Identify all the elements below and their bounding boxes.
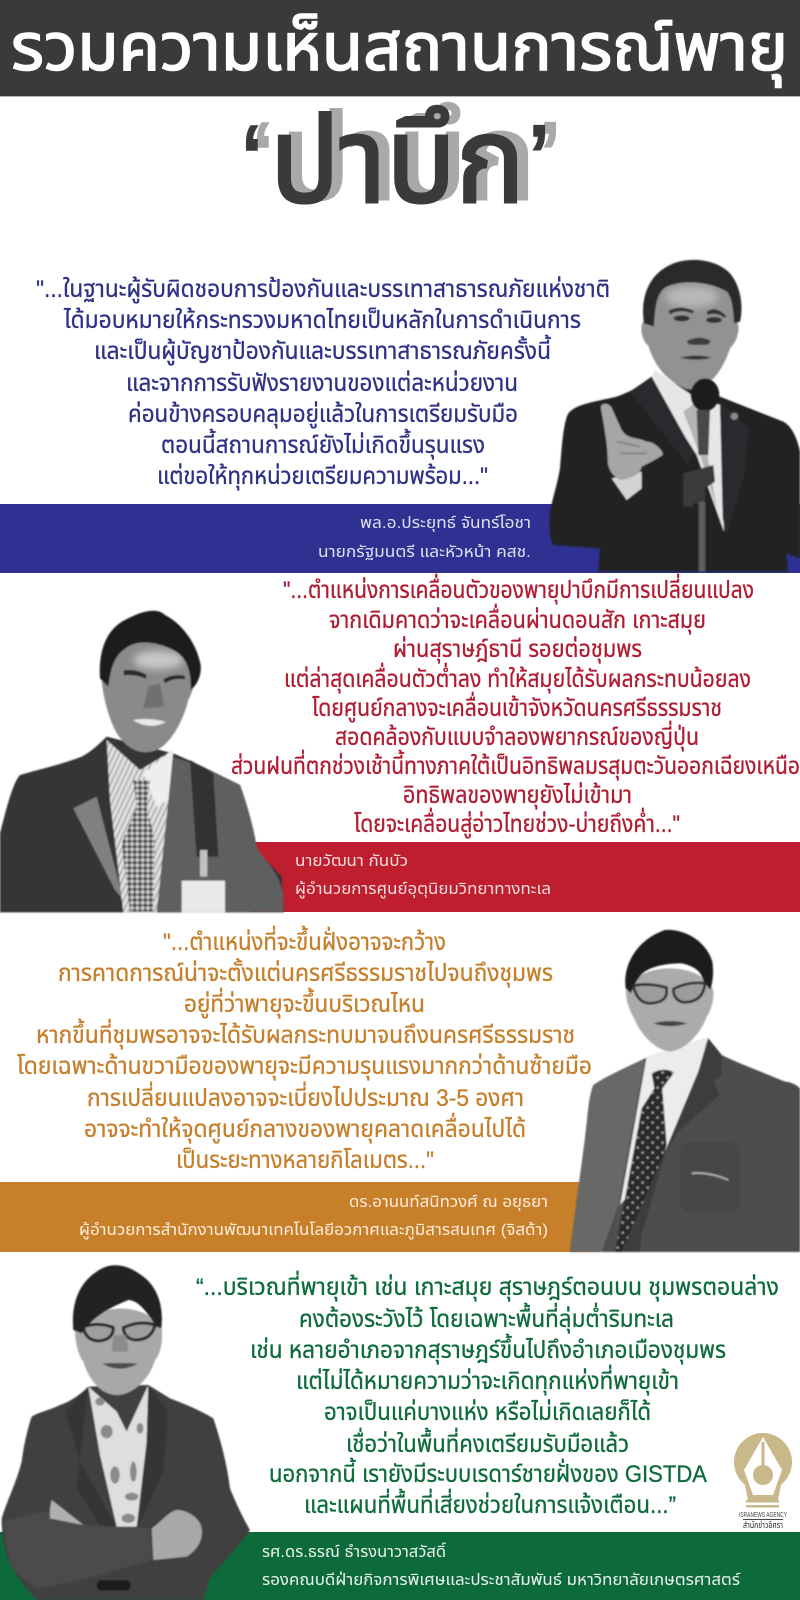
quote text orange: อาจจะทำให้จุดศูนย์กลางของพายุคลาดเคลื่อนไปได้ bbox=[84, 1112, 526, 1144]
title: รวมความเห็นสถานการณ์พายุ bbox=[11, 10, 788, 87]
speaker name bbox=[79, 1194, 548, 1239]
quote text orange: การคาดการณ์น่าจะตั้งแต่นครศรีธรรมราชไปจนถึงชุมพร bbox=[58, 957, 553, 988]
subtitle: storm name: ปาบึก bbox=[281, 91, 536, 225]
quote text green: แต่ไม่ได้หมายความว่าจะเกิดทุกแห่งที่พายุเข้า bbox=[296, 1364, 679, 1396]
speaker name: นายวัฒนา กันบัว bbox=[295, 853, 408, 870]
quote text blue: และเป็นผู้บัญชาป้องกันและบรรเทาสาธารณภัยครั้งนี้ bbox=[94, 334, 551, 366]
quote text red: แต่ล่าสุดเคลื่อนตัวต่ำลง ทำให้สมุยได้รับผลกระทบน้อยลง bbox=[284, 662, 751, 694]
photo: Anond bbox=[570, 930, 800, 1252]
name band orange bbox=[0, 1182, 600, 1252]
name band blue bbox=[0, 504, 800, 573]
speaker name bbox=[295, 853, 551, 898]
speaker name: ดร.อานนท์สนิทวงศ์ ณ อยุธยา bbox=[349, 1194, 548, 1211]
quote text blue: "...ในฐานะผู้รับผิดชอบการป้องกันและบรรเทาสาธารณภัยแห่งชาติ bbox=[36, 275, 610, 304]
panel: quote 1 Prayut bbox=[0, 260, 800, 573]
quote text red: โดยจะเคลื่อนสู่อ่าวไทยช่วง-บ่ายถึงค่ำ..." bbox=[354, 807, 680, 839]
quote text green: “...บริเวณที่พายุเข้า เช่น เกาะสมุย สุราษฎร์ตอนบน ชุมพรตอนล่าง bbox=[196, 1270, 779, 1302]
subtitle: storm name: ’ bbox=[527, 102, 551, 223]
quote text orange: เป็นระยะทางหลายกิโลเมตร..." bbox=[176, 1147, 434, 1174]
quote text orange: อยู่ที่ว่าพายุจะขึ้นบริเวณไหน bbox=[184, 987, 425, 1019]
quote text green: เช่น หลายอำเภอจากสุราษฎร์ขึ้นไปถึงอำเภอเมืองชุมพร bbox=[250, 1333, 726, 1365]
quote text green: เชื่อว่าในพื้นที่คงเตรียมรับมือแล้ว bbox=[346, 1427, 629, 1458]
subtitle: storm name: ‘ bbox=[251, 99, 275, 220]
name band red bbox=[250, 842, 800, 912]
speaker name bbox=[318, 515, 531, 561]
quote text blue: ตอนนี้สถานการณ์ยังไม่เกิดขึ้นรุนแรง bbox=[161, 428, 485, 460]
speaker name: ผู้อำนวยการศูนย์อุตุนิยมวิทยาทางทะเล bbox=[295, 881, 551, 898]
speaker name: ผู้อำนวยการสำนักงานพัฒนาเทคโนโลยีอวกาศและภูมิสารสนเทศ (จิสด้า) bbox=[79, 1222, 548, 1239]
quote text green: คงต้องระวังไว้ โดยเฉพาะพื้นที่ลุ่มต่ำริมทะเล bbox=[299, 1302, 674, 1334]
quote text red: สอดคล้องกับแบบจำลองพยากรณ์ของญี่ปุ่น bbox=[335, 720, 699, 752]
quote text red bbox=[231, 573, 800, 839]
quote text blue: ค่อนข้างครอบคลุมอยู่แล้วในการเตรียมรับมือ bbox=[128, 400, 518, 429]
speaker name bbox=[262, 1542, 741, 1589]
subtitle: storm name: ปาบึก bbox=[270, 94, 525, 228]
panel: quote 4 Thon bbox=[0, 1265, 800, 1600]
panel: quote 2 Wattana bbox=[0, 573, 800, 912]
photo: Thon bbox=[2, 1265, 250, 1600]
speaker name: นายกรัฐมนตรี และหัวหน้า คสช. bbox=[318, 544, 531, 561]
quote text red: อิทธิพลของพายุยังไม่เข้ามา bbox=[403, 781, 632, 810]
speaker name: รองคณบดีฝ่ายกิจการพิเศษและประชาสัมพันธ์ มหาวิทยาลัยเกษตรศาสตร์ bbox=[262, 1571, 741, 1589]
quote text blue: ได้มอบหมายให้กระทรวงมหาดไทยเป็นหลักในการดำเนินการ bbox=[63, 307, 581, 334]
photo: Wattana bbox=[0, 611, 284, 912]
quote text red: โดยศูนย์กลางจะเคลื่อนเข้าจังหวัดนครศรีธรรมราช bbox=[312, 691, 722, 723]
quote text orange bbox=[17, 925, 592, 1174]
quote text red: จากเดิมคาดว่าจะเคลื่อนผ่านดอนสัก เกาะสมุย bbox=[329, 603, 706, 635]
quote text green: และแผนที่พื้นที่เสี่ยงช่วยในการแจ้งเตือน...” bbox=[304, 1488, 676, 1519]
panel: quote 3 Anond bbox=[0, 925, 800, 1252]
speaker name: รศ.ดร.ธรณ์ ธำรงนาวาสวัสดิ์ bbox=[262, 1542, 446, 1561]
quote text orange: หากขึ้นที่ชุมพรอาจจะได้รับผลกระทบมาจนถึงนครศรีธรรมราช bbox=[36, 1018, 575, 1050]
subtitle: storm name: ’ bbox=[538, 99, 562, 220]
speaker name: พล.อ.ประยุทธ์ จันทร์โอชา bbox=[360, 515, 531, 532]
quote text blue: และจากการรับฟังรายงานของแต่ละหน่วยงาน bbox=[126, 369, 518, 397]
quote text orange: การเปลี่ยนแปลงอาจจะเบี่ยงไปประมาณ 3-5 องศา bbox=[87, 1081, 524, 1112]
quote text orange: "...ตำแหน่งที่จะขึ้นฝั่งอาจจะกว้าง bbox=[163, 925, 446, 956]
logo: Isranews Agency bbox=[734, 1433, 792, 1530]
quote text green: อาจเป็นแค่บางแห่ง หรือไม่เกิดเลยก็ได้ bbox=[324, 1398, 651, 1426]
quote text red: ผ่านสุราษฎ์ธานี รอยต่อชุมพร bbox=[393, 635, 642, 664]
panel: title header bbox=[0, 0, 800, 97]
photo: Prayut bbox=[549, 260, 800, 572]
subtitle: storm name: ‘ bbox=[240, 102, 264, 223]
quote text orange: โดยเฉพาะด้านขวามือของพายุจะมีความรุนแรงมากกว่าด้านซ้ายมือ bbox=[17, 1052, 592, 1081]
name band green bbox=[0, 1532, 800, 1600]
quote text green: นอกจากนี้ เรายังมีระบบเรดาร์ชายฝั่งของ GISTDA bbox=[269, 1457, 707, 1488]
quote text green bbox=[196, 1270, 779, 1519]
quote text blue: แต่ขอให้ทุกหน่วยเตรียมความพร้อม..." bbox=[157, 462, 488, 491]
quote text blue bbox=[36, 275, 610, 491]
logo: Isranews Agency: สำนักข่าวอิศรา bbox=[743, 1520, 783, 1530]
